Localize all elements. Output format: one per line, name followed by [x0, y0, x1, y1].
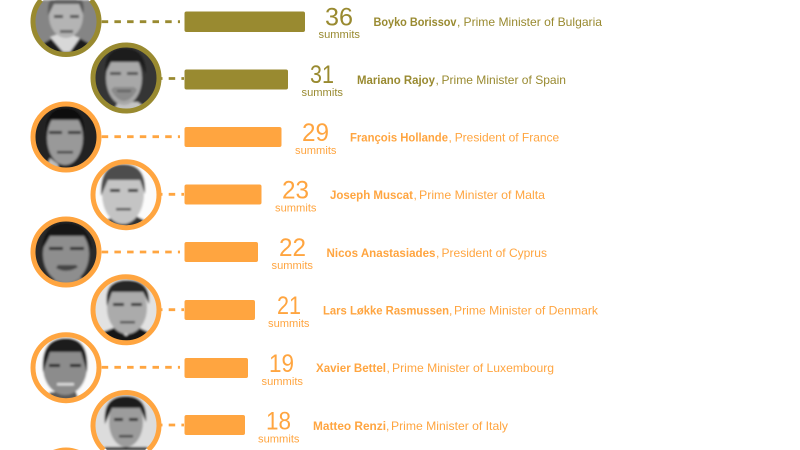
value: 29 summits: summits	[295, 145, 337, 157]
label: Mariano Rajoy: ,	[436, 73, 439, 87]
label: Lars Løkke Rasmussen	[323, 304, 599, 318]
label: Nicos Anastasiades	[326, 246, 547, 260]
row: François Hollande	[30, 101, 560, 173]
portrait: Nicos Anastasiades	[30, 216, 102, 288]
value: 22 summits	[272, 234, 313, 272]
row: Matteo Renzi	[90, 390, 508, 450]
label: François Hollande	[350, 130, 560, 144]
value: 23 summits	[275, 176, 317, 214]
value: 19 summits	[262, 350, 303, 388]
label: Mariano Rajoy: Mariano Rajoy	[357, 73, 435, 87]
value: 22 summits: summits	[272, 260, 313, 272]
label: François Hollande: ,	[448, 130, 452, 144]
value: 21 summits: 21	[277, 292, 301, 320]
value: 29 summits	[295, 119, 337, 157]
value: 36 summits: summits	[318, 29, 360, 41]
label: Lars Løkke Rasmussen: ,	[449, 304, 452, 318]
row: Xavier Bettel	[30, 332, 554, 404]
portrait: Xavier Bettel	[30, 332, 102, 404]
bar: 18	[184, 415, 245, 435]
value: 21 summits: summits	[268, 318, 310, 330]
value: 31 summits: 31	[310, 61, 334, 89]
portrait: Matteo Renzi	[90, 390, 162, 450]
connector: Rajoy	[156, 77, 184, 80]
label: Mariano Rajoy	[357, 73, 566, 87]
label: Joseph Muscat: Joseph Muscat	[330, 188, 413, 202]
label: Xavier Bettel: Prime Minister of Luxembourg	[392, 361, 554, 375]
label: François Hollande: President of France	[455, 130, 560, 144]
label: Matteo Renzi: Matteo Renzi	[313, 419, 386, 433]
portrait: Lars Løkke Rasmussen	[90, 274, 162, 346]
value: 21 summits	[268, 292, 310, 330]
value: 36 summits: 36	[325, 4, 353, 32]
row: Mariano Rajoy	[90, 42, 566, 114]
label: Nicos Anastasiades: Nicos Anastasiades	[326, 246, 436, 260]
label: Lars Løkke Rasmussen: Prime Minister of Denmark	[454, 304, 599, 318]
value: 18 summits: 18	[266, 408, 291, 436]
bar: 31	[184, 70, 288, 90]
connector: Renzi	[156, 424, 184, 426]
label: Joseph Muscat: Prime Minister of Malta	[419, 188, 545, 202]
portrait: François Hollande	[30, 101, 102, 173]
label: Joseph Muscat	[330, 188, 545, 202]
bar: 36	[184, 12, 305, 32]
label: Nicos Anastasiades: President of Cyprus	[442, 246, 547, 260]
value: 23 summits: 23	[282, 176, 309, 204]
value: 31 summits: summits	[302, 87, 343, 99]
value: 31 summits	[302, 61, 343, 99]
label: Matteo Renzi: ,	[386, 419, 389, 433]
label: Matteo Renzi	[313, 419, 508, 433]
label: Boyko Borissov: ,	[457, 15, 460, 29]
label: Boyko Borissov: Prime Minister of Bulgaria	[464, 15, 602, 29]
row: Joseph Muscat	[90, 158, 545, 230]
portrait ring: next leader, cropped at bottom edge	[53, 448, 79, 450]
label: François Hollande: François Hollande	[350, 130, 448, 144]
value: 29 summits: 29	[302, 119, 329, 147]
portrait: Mariano Rajoy	[90, 42, 162, 114]
bar: 21	[184, 300, 255, 320]
label: Joseph Muscat: ,	[414, 188, 417, 202]
connector: Hollande	[102, 135, 180, 138]
connector: Muscat	[156, 193, 184, 196]
label: Boyko Borissov	[374, 15, 602, 29]
label: Xavier Bettel: Xavier Bettel	[316, 361, 386, 375]
bar: 29	[184, 127, 282, 147]
bar: 19	[184, 358, 248, 378]
value: 22 summits: 22	[279, 234, 306, 262]
bar: 22	[184, 242, 258, 262]
value: 18 summits	[258, 408, 300, 446]
value: 18 summits: summits	[258, 434, 300, 446]
connector: Bettel	[102, 366, 180, 369]
portrait: Joseph Muscat	[90, 158, 162, 230]
label: Nicos Anastasiades: ,	[436, 246, 439, 260]
connector: Anastasiades	[102, 251, 180, 253]
label: Mariano Rajoy: Prime Minister of Spain	[442, 73, 566, 87]
connector: Rasmussen	[156, 308, 184, 311]
label: Xavier Bettel	[316, 361, 554, 375]
label: Boyko Borissov: Boyko Borissov	[374, 15, 457, 29]
portrait: Boyko Borissov	[30, 0, 102, 57]
label: Xavier Bettel: ,	[386, 361, 390, 375]
value: 36 summits	[318, 4, 360, 41]
row: Nicos Anastasiades	[30, 216, 547, 288]
value: 19 summits: summits	[262, 376, 303, 388]
row: Boyko Borissov	[30, 0, 602, 57]
bar: 23	[184, 184, 262, 204]
value: 19 summits: 19	[269, 350, 294, 378]
row: Lars Løkke Rasmussen	[90, 274, 599, 346]
label: Lars Løkke Rasmussen: Lars Løkke Rasmussen	[323, 304, 449, 318]
connector: Borissov	[102, 20, 180, 23]
label: Matteo Renzi: Prime Minister of Italy	[391, 419, 508, 433]
value: 23 summits: summits	[275, 202, 317, 214]
